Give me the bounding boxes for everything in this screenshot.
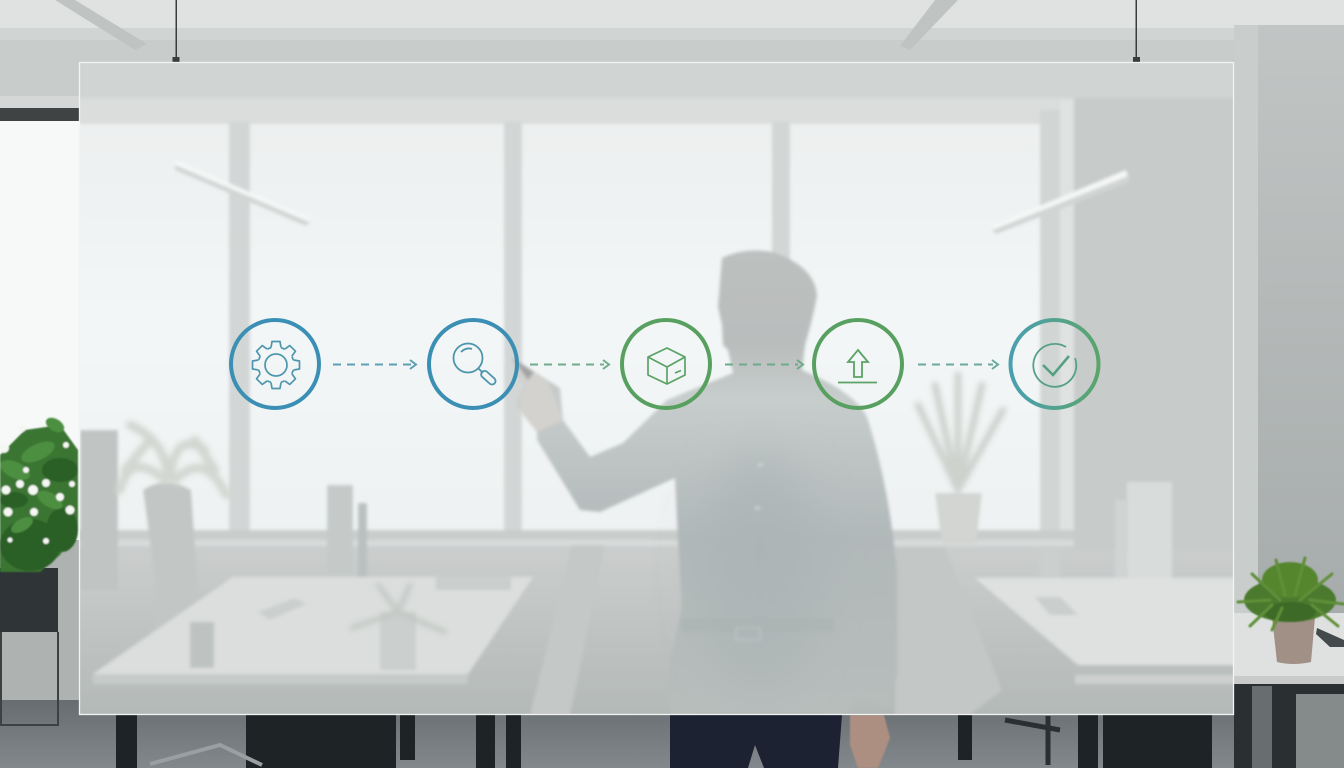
step 3: box	[622, 320, 710, 408]
hanging wires	[172, 0, 1140, 66]
arrow 4	[918, 360, 998, 369]
icon: gear	[252, 342, 300, 388]
step 1: gear	[231, 320, 319, 408]
blurred plants and office furniture	[80, 375, 1172, 660]
icon: package box	[648, 348, 685, 384]
person's legs below the panel	[670, 715, 890, 768]
icon: magnifying glass	[454, 344, 497, 386]
person silhouette	[512, 250, 897, 715]
glass panel	[80, 63, 1233, 714]
icon: check mark	[1033, 344, 1076, 387]
left plant and stand	[0, 415, 78, 725]
arrow 2	[530, 360, 609, 369]
window wall seen through the glass	[80, 98, 1233, 714]
ceiling lights	[175, 160, 1130, 234]
arrow 1	[333, 360, 416, 369]
arrow 3	[725, 360, 803, 369]
right plant in pot	[1238, 558, 1344, 664]
desks	[94, 576, 1233, 714]
step 5: check	[1010, 320, 1098, 408]
glass panel edge	[80, 62, 1234, 714]
floor furniture below the panel	[116, 715, 1212, 768]
step 2: magnifier	[429, 320, 517, 408]
process flow	[231, 320, 1098, 408]
step 4: upload	[814, 320, 902, 408]
icon: upload arrow	[838, 350, 877, 382]
